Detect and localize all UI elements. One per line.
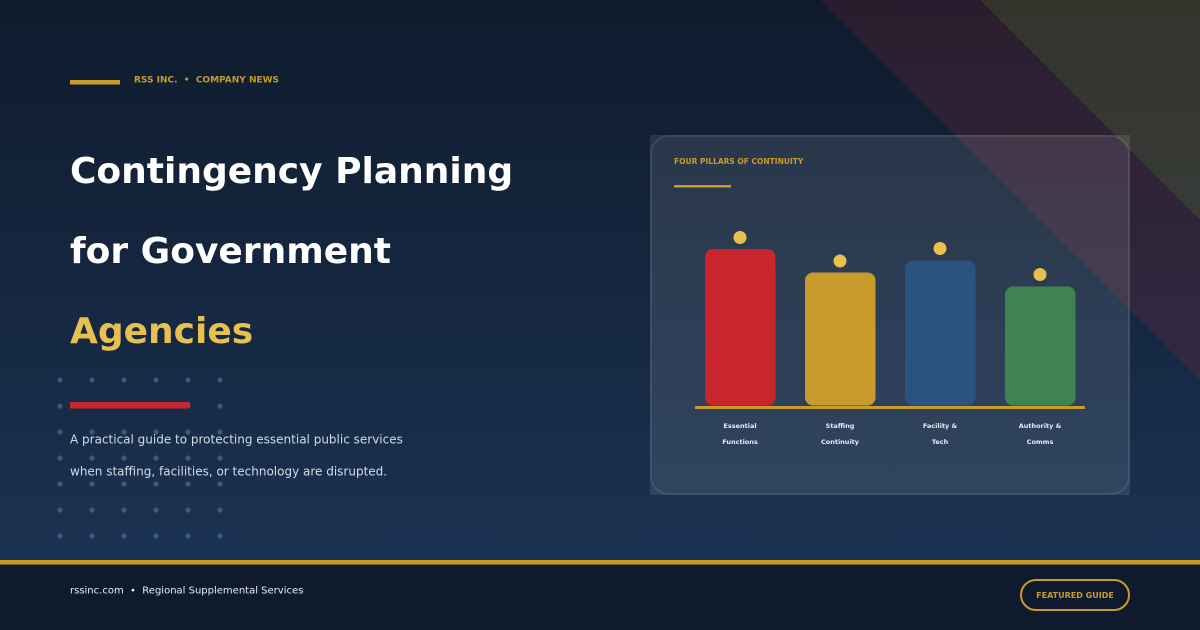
- bar labels: Tech: [932, 438, 949, 446]
- bar labels: Functions: [722, 438, 758, 446]
- badge: featured guide: [1021, 580, 1129, 610]
- corner band: red: [820, 0, 1200, 380]
- panel heading: FOUR PILLARS OF CONTINUITY: [674, 157, 804, 166]
- chart baseline: [695, 406, 1085, 409]
- bar labels: Comms: [1027, 438, 1053, 446]
- title: for Government: [70, 231, 391, 272]
- corner triangle: gold: [980, 0, 1200, 220]
- bar labels: Continuity: [821, 438, 860, 446]
- bar labels: Staffing: [826, 422, 855, 430]
- footer: [0, 560, 1200, 630]
- panel border: [651, 136, 1129, 494]
- panel: four pillars of continuity: [650, 135, 1130, 495]
- bar labels: Essential: [723, 422, 757, 430]
- subtitle: [70, 432, 403, 478]
- bar: facility and tech: [905, 260, 976, 406]
- footer gold rule: [0, 560, 1200, 564]
- eyebrow text: RSS INC. • COMPANY NEWS: [134, 76, 279, 86]
- subtitle: A practical guide to protecting essential public services: [70, 432, 403, 446]
- bar: essential functions: [705, 249, 776, 406]
- badge: featured guide: FEATURED GUIDE: [1036, 591, 1114, 600]
- bar chart: [695, 231, 1085, 446]
- eyebrow accent bar: [70, 80, 120, 84]
- red divider: [70, 402, 190, 408]
- bar: authority and comms: [1005, 286, 1076, 406]
- bar labels: [722, 422, 1062, 446]
- panel heading underline: [674, 185, 731, 188]
- title: [70, 151, 513, 352]
- bar labels: Authority &: [1019, 422, 1062, 430]
- dot grid: [57, 377, 223, 539]
- footer text: rssinc.com • Regional Supplemental Services: [70, 586, 303, 596]
- subtitle: when staffing, facilities, or technology are disrupted.: [70, 464, 387, 478]
- panel background: [650, 135, 1130, 495]
- footer band: [0, 562, 1200, 630]
- bar: staffing continuity: [805, 272, 876, 406]
- bar labels: Facility &: [923, 422, 957, 430]
- title: Agencies: [70, 311, 253, 352]
- marker dots: [734, 231, 1046, 281]
- title: Contingency Planning: [70, 151, 513, 192]
